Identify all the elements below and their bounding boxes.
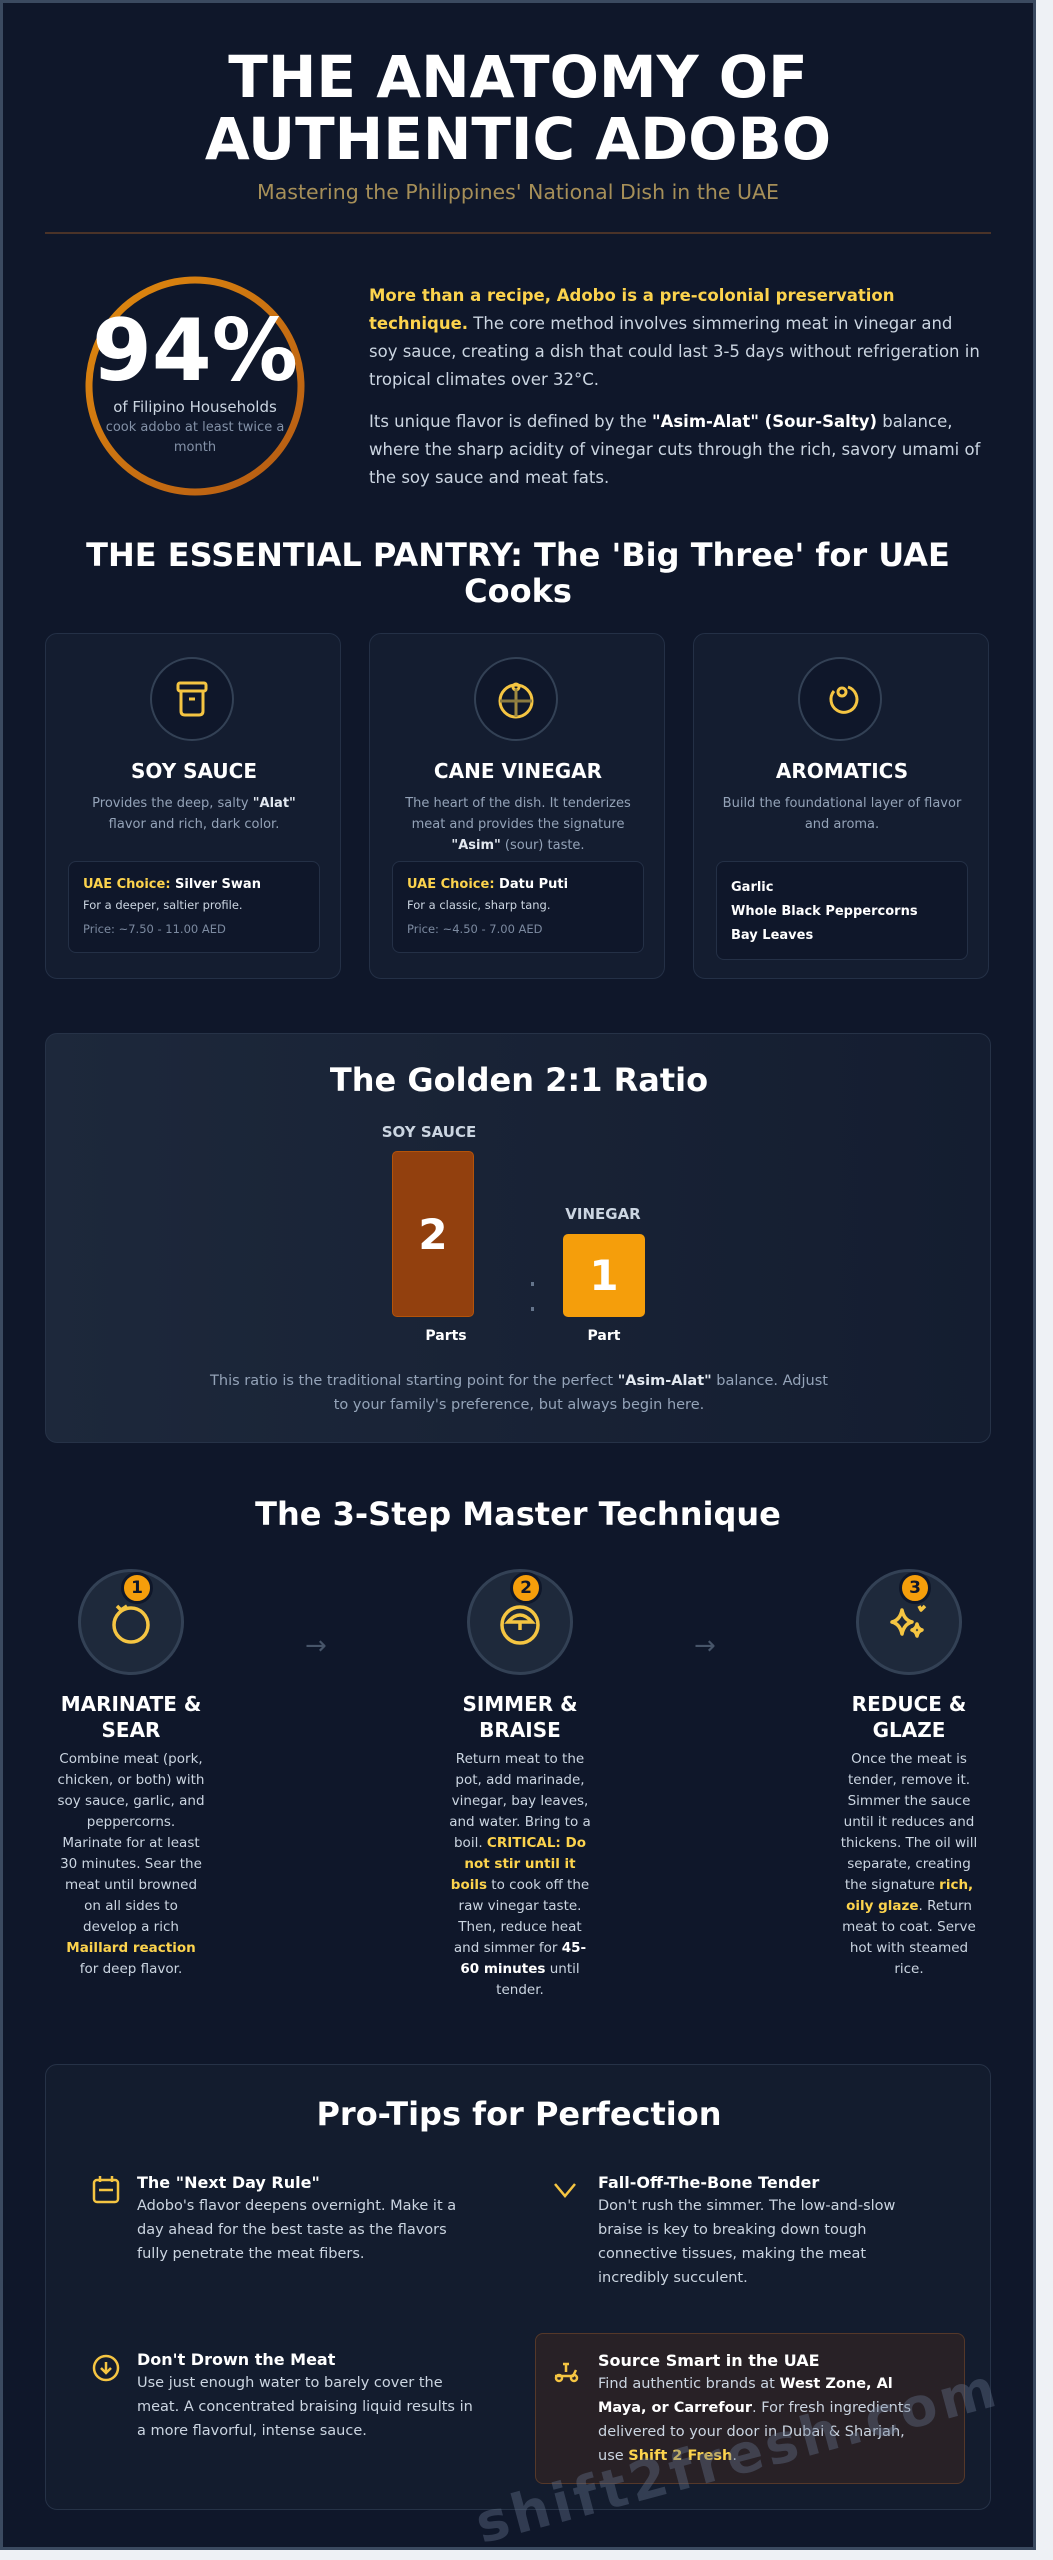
icon: marinate [78,1569,184,1675]
tip: don't drown: Don't Drown the Meat [137,2350,335,2369]
tip: fall-off-the-bone: Fall-Off-The-Bone Tender [598,2173,819,2192]
callout: source smart [535,2333,965,2484]
panel: cane vinegar card: CANE VINEGAR [434,759,602,783]
subtitle: Mastering the Philippines' National Dish in the UAE [257,180,779,204]
panel: soy sauce card: Price: ~7.50 - 11.00 AED [83,922,226,936]
tip: fall-off-the-bone: Don't rush the simmer. The low-and-slow braise is key to breaking down tough connective tissues, making the meat incredibly succulent. [598,2198,895,2286]
heading: pro-tips: Pro-Tips for Perfection [316,2095,722,2133]
heading: essential pantry: THE ESSENTIAL PANTRY: The 'Big Three' for UAE Cooks [86,536,950,610]
tip: next day rule: Adobo's flavor deepens overnight. Make it a day ahead for the best taste as the flavors fully penetrate the meat fibers. [137,2198,456,2262]
panel: soy sauce card [45,633,341,979]
step 1: MARINATE & SEAR [61,1692,201,1742]
icon: scooter [554,2362,578,2382]
panel: aromatics card: Whole Black Peppercorns [731,904,918,919]
title [205,43,831,173]
title: THE ANATOMY OF [228,43,808,111]
tip: don't drown: Use just enough water to barely cover the meat. A concentrated braising liquid results in a more flavorful, intense sauce. [137,2375,473,2439]
panel: aromatics card: Garlic [731,880,773,895]
tip: next day rule: The "Next Day Rule" [137,2173,320,2192]
bar chart: ratio: Part [588,1328,620,1344]
icon: vinegar [474,657,558,741]
panel: cane vinegar card: The heart of the dish. It tenderizes meat and provides the signature "Asim" (sour) taste. [405,796,631,853]
step 3: 3 [909,1578,921,1598]
arrow: → [694,1631,716,1661]
panel: pro-tips [45,2064,991,2510]
panel: soy sauce card: For a deeper, saltier profile. [83,898,243,912]
panel: golden ratio [45,1033,991,1443]
icon: pot [467,1569,573,1675]
icon: jar [150,657,234,741]
heading: 3-step technique: The 3-Step Master Technique [255,1495,781,1533]
stat circle: 94% [86,276,304,496]
bar chart: ratio: SOY SAUCE [382,1123,476,1141]
step 1 [57,1569,205,1977]
stat circle: 94%: 94% [92,301,298,401]
intro text: More than a recipe, Adobo is a pre-colonial preservation technique. The core method involves simmering meat in vinegar and soy sauce, creating a dish that could last 3-5 days without refrigeration in tropical climates over 32°C. [369,286,980,389]
panel: soy sauce card: SOY SAUCE [131,759,257,783]
bar chart: ratio: 2 [418,1210,448,1259]
icon: chevron [554,2183,576,2198]
heading: golden ratio: The Golden 2:1 Ratio [330,1061,708,1099]
step 2: 2 [520,1578,532,1598]
panel: soy sauce card: UAE Choice: Silver Swan [83,877,261,892]
title: AUTHENTIC ADOBO [205,105,831,173]
intro text: Its unique flavor is defined by the "Asim-Alat" (Sour-Salty) balance, where the sharp acidity of vinegar cuts through the rich, savory umami of the soy sauce and meat fats. [369,412,980,487]
step 2 [449,1569,591,1998]
panel: soy sauce card: Provides the deep, salty "Alat" flavor and rich, dark color. [92,796,296,832]
panel: aromatics card: AROMATICS [776,759,908,783]
callout: source smart: Find authentic brands at West Zone, Al Maya, or Carrefour. For fresh ingredients delivered to your door in Dubai & Sharjah, use Shift 2 Fresh. [598,2376,911,2464]
tip: don't drown [92,2350,473,2439]
panel: cane vinegar card: For a classic, sharp tang. [407,898,551,912]
bar chart: ratio [382,1123,645,1344]
step 3: REDUCE & GLAZE [852,1692,966,1742]
panel: cane vinegar card: Price: ~4.50 - 7.00 AED [407,922,543,936]
panel: cane vinegar card: UAE Choice: Datu Puti [407,877,568,892]
intro text [369,286,981,487]
step 2: SIMMER & BRAISE [462,1692,578,1742]
panel: aromatics card: Build the foundational layer of flavor and aroma. [723,796,961,832]
stat circle: 94%: of Filipino Households [113,398,277,416]
tip: next day rule [92,2173,456,2262]
panel: cane vinegar card [369,633,665,979]
bar chart: ratio: 1 [589,1251,619,1300]
icon: sparkles [856,1569,962,1675]
icon: calendar [92,2176,120,2204]
step 3: Once the meat is tender, remove it. Simmer the sauce until it reduces and thickens. The oil will separate, creating the signature rich, oily glaze. Return meat to coat. Serve hot with steamed rice. [841,1751,977,1977]
tip: fall-off-the-bone [554,2173,895,2286]
icon: down arrow circle [92,2354,120,2382]
bar chart: ratio: Parts [425,1328,467,1344]
watermark: shift2fresh.com [469,2356,1006,2550]
step 2: Return meat to the pot, add marinade, vinegar, bay leaves, and water. Bring to a boil. CRITICAL: Do not stir until it boils to cook off the raw vinegar taste. Then, reduce heat and simmer for 45-60 minutes until tender. [449,1751,591,1998]
stat circle: 94%: cook adobo at least twice a month [106,420,284,455]
arrow: → [305,1631,327,1661]
bar chart: ratio: VINEGAR [565,1205,641,1223]
callout: source smart: Source Smart in the UAE [598,2351,820,2370]
panel: aromatics card: Bay Leaves [731,928,813,943]
step 1: Combine meat (pork, chicken, or both) with soy sauce, garlic, and peppercorns. Marinate for at least 30 minutes. Sear the meat until browned on all sides to develop a rich Maillard reaction for deep flavor. [57,1751,205,1977]
step 3 [841,1569,977,1977]
step 1: 1 [131,1578,143,1598]
panel: aromatics card [693,633,989,979]
caption: This ratio is the traditional starting point for the perfect "Asim-Alat" balance. Adjust to your family's preference, but always begin here. [210,1373,828,1413]
icon: garlic [798,657,882,741]
